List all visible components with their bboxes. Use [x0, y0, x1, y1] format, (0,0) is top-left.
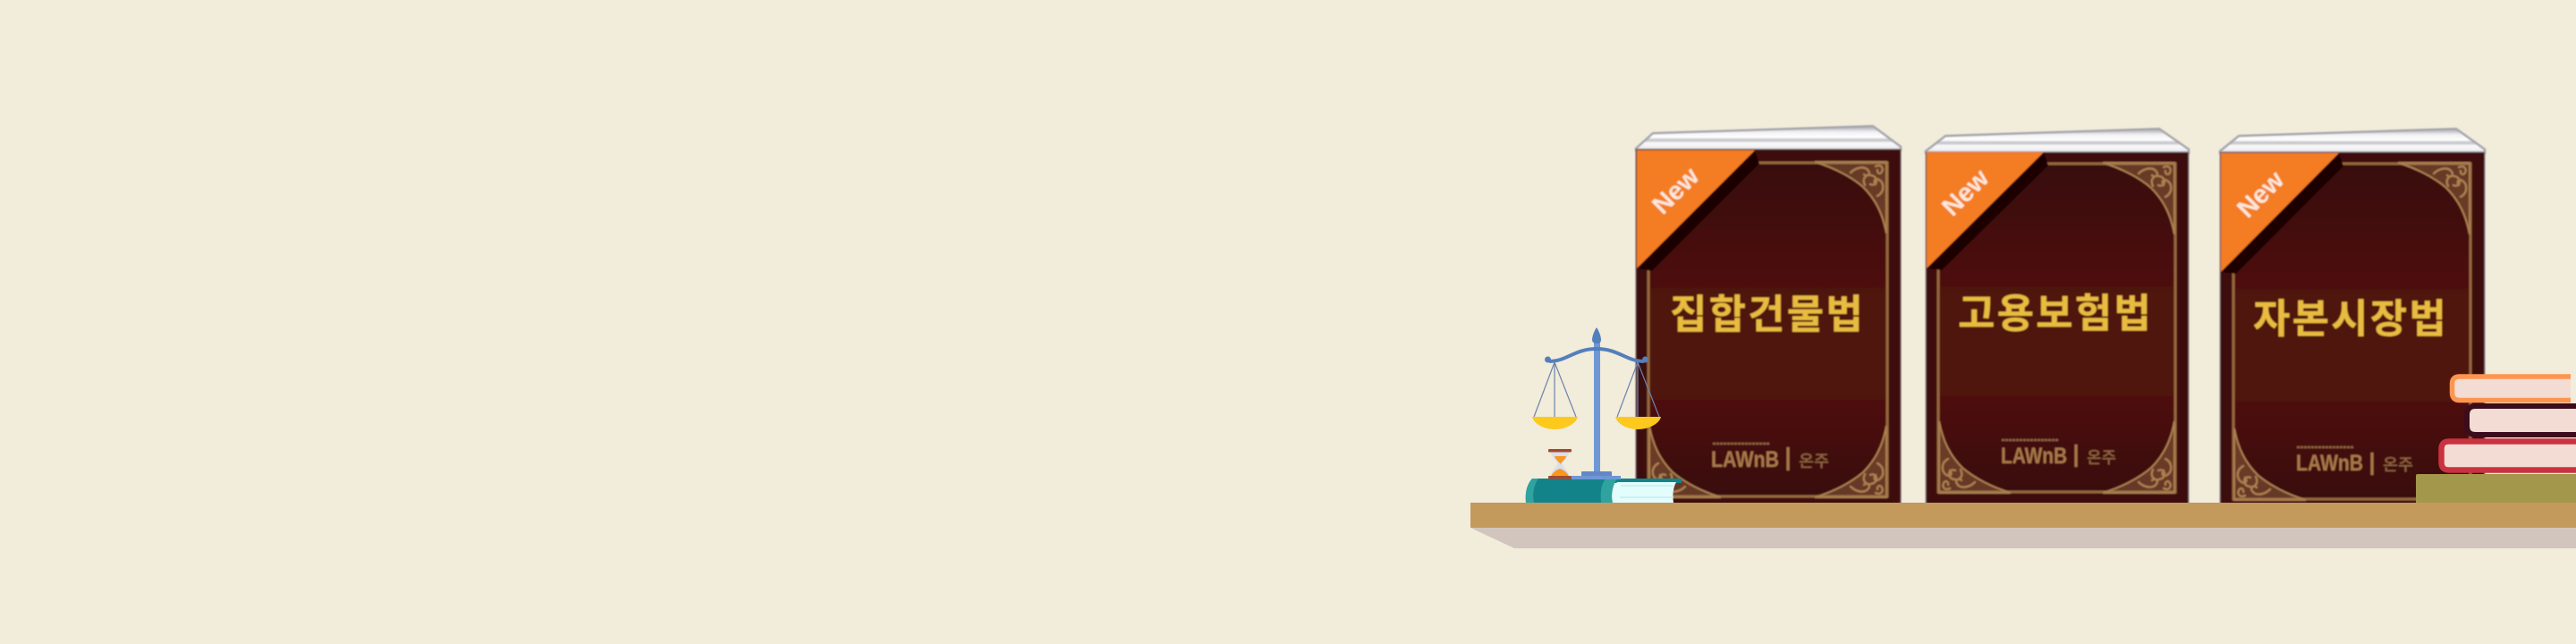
shelf board: [1470, 503, 2576, 528]
book: dark: [2467, 406, 2576, 435]
book 2 cover: [1926, 152, 2189, 507]
book 2 publisher mark: [2001, 440, 2116, 469]
icon: teal book: [1526, 479, 1682, 503]
book: red: [2442, 442, 2576, 470]
right pan: [1615, 417, 1661, 429]
scale beam: [1549, 349, 1644, 361]
icon: balance scale: [1532, 327, 1661, 479]
book: olive: [2416, 474, 2576, 503]
book 1 cover panel: [1648, 162, 1887, 497]
book 3 publisher mark: 온주: [2383, 456, 2413, 474]
book 2 new ribbon: New: [1936, 164, 1995, 222]
book 3 new ribbon: New: [2232, 165, 2290, 224]
book: 고용보험법: [1926, 129, 2189, 507]
shelf: [1470, 503, 2576, 548]
icon: hourglass: [1548, 449, 1572, 479]
book 1 publisher mark: [1711, 444, 1829, 472]
book 3 new ribbon: [2221, 153, 2343, 274]
book 1 new ribbon: New: [1647, 162, 1705, 220]
book 1 new ribbon: [1637, 150, 1759, 271]
book 1 page block: [1636, 126, 1901, 150]
scale finial: [1592, 327, 1601, 343]
book: 자본시장법: [2220, 129, 2485, 507]
book 2 new ribbon: [1927, 152, 2048, 270]
book 3 publisher mark: [2296, 447, 2413, 476]
book 2 publisher mark: 온주: [2087, 449, 2116, 467]
book 2 title: 고용보험법: [1958, 291, 2153, 336]
book 3 publisher mark: LAWnB: [2296, 451, 2363, 476]
book 2 page block: [1926, 129, 2189, 153]
scale strings: [1534, 362, 1659, 417]
shelf shadow: [1470, 528, 2576, 548]
scale post: [1594, 343, 1600, 473]
book 2 cover panel: [1938, 163, 2175, 493]
book 2 publisher mark: LAWnB: [2001, 444, 2067, 469]
left pan: [1532, 417, 1578, 429]
scale base: [1581, 471, 1612, 477]
book 1 publisher mark: 온주: [1799, 453, 1829, 470]
stack of books: [2416, 377, 2576, 503]
book: 집합건물법: [1636, 126, 1901, 507]
book 3 page block: [2220, 129, 2485, 153]
book 3 title: 자본시장법: [2253, 296, 2448, 342]
book: orange: [2453, 377, 2571, 401]
book 3 cover: [2220, 152, 2485, 507]
book 1 publisher mark: LAWnB: [1711, 447, 1779, 472]
book 1 title: 집합건물법: [1670, 292, 1865, 337]
book 3 cover panel: [2233, 163, 2470, 500]
book 1 cover: [1636, 149, 1901, 507]
